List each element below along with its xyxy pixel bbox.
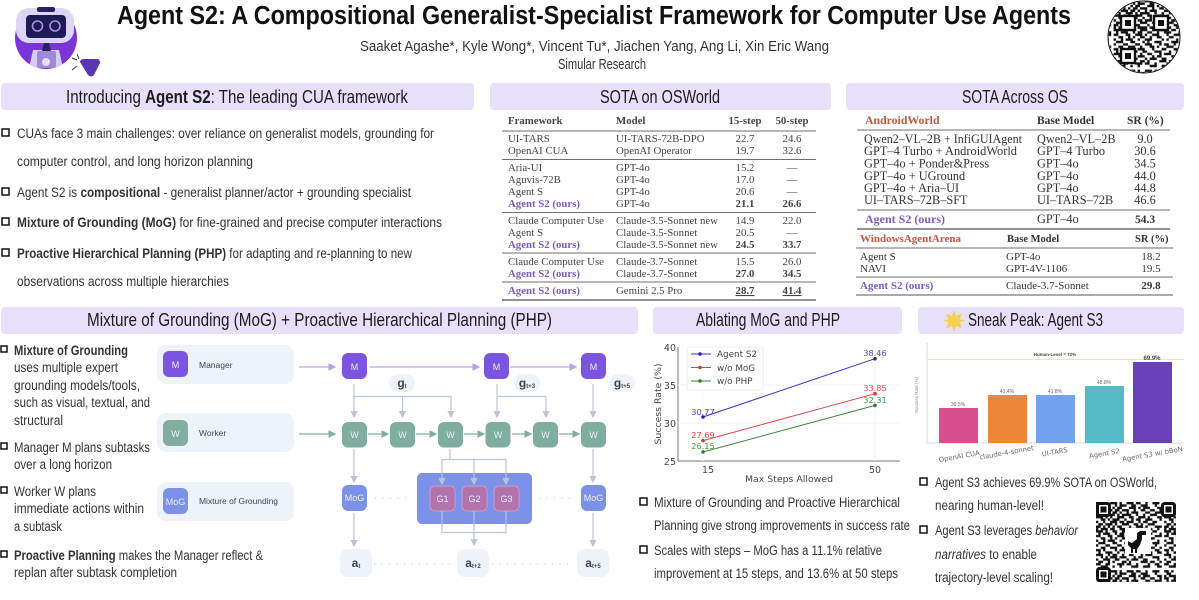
table: OSWorld results: Claude Computer Use xyxy=(508,256,604,268)
table: AndroidWorld: Qwen2–VL–2B xyxy=(1037,132,1116,146)
diagram: legend xyxy=(157,345,294,521)
table: OSWorld results: Framework xyxy=(508,115,563,127)
table: OSWorld results: Claude-3.7-Sonnet xyxy=(616,256,697,268)
diagram: worker nodes: W xyxy=(541,430,550,440)
line chart: success rate: Success Rate (%) xyxy=(654,363,664,445)
heading: SOTA on OSWorld xyxy=(490,83,831,110)
diagram: worker nodes xyxy=(342,422,606,448)
chart legend: w/o MoG xyxy=(717,364,755,374)
diagram: goal labels: g xyxy=(397,376,405,390)
table: AndroidWorld: GPT–4o xyxy=(1037,169,1079,183)
diagram: MoG nodes: MoG xyxy=(345,493,364,503)
bar chart: Agent S3 comparison: 30.5% xyxy=(951,402,966,408)
bar chart: Agent S3 comparison: Agent S3 w/ bBoN xyxy=(1122,445,1183,464)
table: WindowsAgentArena: 18.2 xyxy=(1141,251,1161,263)
diagram: worker nodes: W xyxy=(494,430,503,440)
line chart: success rate: 40 xyxy=(664,343,676,354)
table: AndroidWorld: 9.0 xyxy=(1137,132,1153,146)
bullet: strong improvements: Mixture of Grounding and Proactive Hierarchical xyxy=(654,495,900,511)
table: AndroidWorld: GPT–4o xyxy=(1037,156,1079,170)
table: OSWorld results: 20.5 xyxy=(736,227,754,239)
bullet: mixture of grounding details: grounding models/tools, xyxy=(14,378,140,394)
table: OSWorld results: 26.0 xyxy=(783,256,801,268)
bullet: proactive hierarchical planning: Proactive Hierarchical Planning (PHP) for adapting and re-planning to new xyxy=(17,246,413,262)
table: OSWorld results: 22.7 xyxy=(736,133,755,145)
table: AndroidWorld: GPT–4o + Aria–UI xyxy=(864,181,959,195)
line chart: success rate: 50 xyxy=(869,465,881,476)
diagram: goal labels: t+3 xyxy=(526,384,536,390)
table: AndroidWorld: GPT–4 Turbo xyxy=(1037,144,1105,158)
bar chart: Agent S3 comparison: 48.8% xyxy=(1097,380,1112,386)
diagram: manager nodes: M xyxy=(493,362,500,372)
table: OSWorld results: Aguvis-72B xyxy=(508,174,561,186)
diagram: MoG nodes: MoG xyxy=(584,493,603,503)
table: OSWorld results: Aria-UI xyxy=(508,162,543,174)
bullet: three challenges: computer control, and long horizon planning xyxy=(17,154,253,170)
line chart: success rate: 25 xyxy=(664,457,676,468)
table: AndroidWorld: 46.6 xyxy=(1134,193,1156,207)
bar chart: Agent S3 comparison: 41.4% xyxy=(1000,389,1015,395)
table: OSWorld results: — xyxy=(786,174,798,186)
table: AndroidWorld: UI–TARS–72B xyxy=(1037,193,1113,207)
heading: introducing: Introducing Agent S2: The leading CUA framework xyxy=(66,87,409,107)
table: AndroidWorld xyxy=(857,113,1170,229)
bullet: proactive planning xyxy=(1,548,263,581)
diagram: grounding box: G3 xyxy=(500,494,513,504)
bullet: mixture of grounding details: structural xyxy=(14,413,63,429)
bullet: worker xyxy=(1,484,144,535)
table: WindowsAgentArena: 29.8 xyxy=(1141,280,1161,292)
bullet: proactive planning: Proactive Planning makes the Manager reflect & xyxy=(14,548,263,564)
diagram: legend: Worker xyxy=(199,428,226,438)
bar chart: Agent S3 comparison: 41.8% xyxy=(1048,389,1063,395)
bullet: proactive hierarchical planning: observations across multiple hierarchies xyxy=(17,274,229,290)
bullet: worker: immediate actions within xyxy=(14,501,144,517)
table: OSWorld results: GPT-4o xyxy=(616,186,650,198)
table: OSWorld results: 34.5 xyxy=(783,268,801,280)
table: OSWorld results: 24.6 xyxy=(783,133,802,145)
table: OSWorld results: Claude-3.5-Sonnet new xyxy=(616,239,718,251)
panel: Sneak Peak Agent S3 xyxy=(914,307,1184,586)
table: OSWorld results: GPT-4o xyxy=(616,162,650,174)
heading: introducing xyxy=(1,83,474,110)
bullet: manager xyxy=(1,440,150,473)
table: AndroidWorld: 44.8 xyxy=(1134,181,1156,195)
table: WindowsAgentArena: Agent S2 (ours) xyxy=(860,280,934,292)
diagram: legend: Manager xyxy=(199,360,233,370)
table: OSWorld results: Claude-3.5-Sonnet new xyxy=(616,215,718,227)
diagram: worker nodes: W xyxy=(350,430,359,440)
bullet: three challenges xyxy=(2,126,434,170)
panel: Mixture of Grounding and Proactive Hierarchical Planning xyxy=(1,307,638,581)
table: WindowsAgentArena xyxy=(856,233,1173,295)
authors: Saaket Agashe*, Kyle Wong*, Vincent Tu*, Jiachen Yang, Ang Li, Xin Eric Wang xyxy=(360,38,829,55)
panel: SOTA Across OS xyxy=(846,83,1184,295)
heading: SOTA Across OS: SOTA Across OS xyxy=(962,87,1068,107)
heading: Sneak Peak xyxy=(918,307,1184,334)
diagram: arrows xyxy=(299,367,593,564)
heading: SOTA on OSWorld: SOTA on OSWorld xyxy=(600,87,720,107)
diagram: goal labels: g xyxy=(519,376,526,390)
table: AndroidWorld: GPT–4o + Ponder&Press xyxy=(864,156,989,170)
diagram: worker nodes: W xyxy=(398,430,407,440)
bullet: mixture of grounding details: uses multiple expert xyxy=(14,360,118,376)
table: AndroidWorld: 54.3 xyxy=(1135,214,1155,226)
table: OSWorld results: 14.9 xyxy=(736,215,754,227)
table: OSWorld results: 15.2 xyxy=(736,162,754,174)
table: AndroidWorld: Base Model xyxy=(1037,115,1094,127)
bullet: scales with steps: improvement at 15 steps, and 13.6% at 50 steps xyxy=(654,566,898,582)
table: OSWorld results: 21.1 xyxy=(736,198,754,210)
table: OSWorld results: Agent S2 (ours) xyxy=(508,239,580,251)
line chart: success rate: Max Steps Allowed xyxy=(745,475,833,485)
table: OSWorld results: UI-TARS xyxy=(508,133,550,145)
diagram: manager nodes: M xyxy=(590,362,597,372)
table: OSWorld results: 17.0 xyxy=(736,174,754,186)
heading: Ablating xyxy=(653,307,902,334)
table: OSWorld results: Agent S2 (ours) xyxy=(508,285,580,297)
bullet: mixture of grounding details: Mixture of Grounding xyxy=(14,343,128,359)
bar chart: Agent S3 comparison: OpenAI CUA xyxy=(938,449,981,464)
diagram: goal labels: g xyxy=(614,376,621,390)
table: OSWorld results xyxy=(502,115,816,300)
diagram: action nodes: t+5 xyxy=(592,564,601,570)
table: OSWorld results: — xyxy=(786,162,798,174)
bullet: compositional: Agent S2 is compositional - generalist planner/actor + grounding specialist xyxy=(17,185,411,201)
table: WindowsAgentArena: WindowsAgentArena xyxy=(860,233,962,245)
bar chart: Agent S3 comparison: Success Rate (%) xyxy=(914,376,919,413)
bullet: mixture of grounding: Mixture of Grounding (MoG) for fine-grained and precise computer interactions xyxy=(17,215,442,231)
diagram: worker nodes: W xyxy=(589,430,598,440)
table: OSWorld results: 20.6 xyxy=(736,186,755,198)
table: OSWorld results: Model xyxy=(616,115,645,127)
bullet: behavior narratives xyxy=(920,523,1079,586)
table: WindowsAgentArena: GPT-4o xyxy=(1006,251,1041,263)
diagram: legend: W xyxy=(171,429,180,439)
line chart: success rate: 30 xyxy=(664,419,676,430)
bullet: behavior narratives: trajectory-level scaling! xyxy=(935,570,1053,586)
bullet: 69.9% SOTA: nearing human-level! xyxy=(935,498,1044,514)
line chart: success rate xyxy=(654,343,900,485)
bar chart: Agent S3 comparison: 69.9% xyxy=(1143,356,1161,362)
bullet: strong improvements: Planning give strong improvements in success rate xyxy=(654,518,910,534)
table: OSWorld results: 50-step xyxy=(776,115,808,127)
table: OSWorld results: Agent S2 (ours) xyxy=(508,268,580,280)
table: OSWorld results: Claude-3.7-Sonnet xyxy=(616,268,697,280)
heading: SOTA Across OS xyxy=(846,83,1184,110)
line chart: success rate: 26.15 xyxy=(691,441,715,451)
table: AndroidWorld: AndroidWorld xyxy=(865,113,940,127)
bullet: scales with steps xyxy=(640,543,898,582)
bullet: mixture of grounding details xyxy=(1,343,150,429)
table: OSWorld results: Agent S xyxy=(508,227,543,239)
heading: MoG + PHP: Mixture of Grounding (MoG) + Proactive Hierarchical Planning (PHP) xyxy=(87,310,552,330)
line chart: success rate: 38.46 xyxy=(863,348,887,358)
table: AndroidWorld: 44.0 xyxy=(1134,169,1156,183)
diagram: goal labels xyxy=(389,374,635,392)
diagram: action nodes: a xyxy=(465,556,472,570)
diagram: action nodes: a xyxy=(585,556,592,570)
panel: Ablating MoG and PHP xyxy=(640,307,910,582)
diagram: MoG nodes xyxy=(342,485,606,511)
table: WindowsAgentArena: Agent S xyxy=(860,251,896,263)
diagram: grounding box xyxy=(417,449,532,545)
line chart: success rate: 15 xyxy=(702,465,714,476)
line chart: success rate: 33.85 xyxy=(863,383,887,393)
diagram: action nodes xyxy=(340,549,609,577)
bullet: scales with steps: Scales with steps – MoG has a 11.1% relative xyxy=(654,543,882,559)
chart legend xyxy=(687,347,763,390)
table: OSWorld results: OpenAI CUA xyxy=(508,145,568,157)
table: AndroidWorld: 34.5 xyxy=(1134,156,1156,170)
table: OSWorld results: GPT-4o xyxy=(616,198,650,210)
bullet: manager: Manager M plans subtasks xyxy=(14,440,150,456)
table: OSWorld results: Claude Computer Use xyxy=(508,215,604,227)
diagram: goal labels: t xyxy=(405,384,407,390)
bullet: manager: over a long horizon xyxy=(14,457,112,473)
title: Agent S2: A Compositional Generalist-Specialist Framework for Computer Use Agents xyxy=(117,2,1071,30)
icon: top QR code xyxy=(1108,1,1180,73)
panel: SOTA on OSWorld xyxy=(490,83,831,300)
table: OSWorld results: Claude-3.5-Sonnet xyxy=(616,227,697,239)
chart legend: Agent S2 xyxy=(717,350,757,360)
table: OSWorld results: 32.6 xyxy=(783,145,802,157)
bullet: behavior narratives: Agent S3 leverages behavior xyxy=(935,523,1079,539)
table: WindowsAgentArena: 19.5 xyxy=(1141,263,1161,275)
table: OSWorld results: 27.0 xyxy=(736,268,754,280)
table: AndroidWorld: 30.6 xyxy=(1134,144,1156,158)
bullet: worker: a subtask xyxy=(14,519,63,535)
table: OSWorld results: OpenAI Operator xyxy=(616,145,692,157)
table: AndroidWorld: Agent S2 (ours) xyxy=(865,212,945,226)
bar chart: Agent S3 comparison: Agent S2 xyxy=(1089,447,1120,460)
table: OSWorld results: 24.5 xyxy=(736,239,754,251)
bullet: proactive planning: replan after subtask completion xyxy=(14,565,177,581)
bullet: behavior narratives: narratives to enable xyxy=(935,547,1037,563)
bullet: mixture of grounding details: such as visual, textual, and xyxy=(14,395,150,411)
bar chart: Agent S3 comparison: claude-4-sonnet xyxy=(979,444,1035,462)
table: WindowsAgentArena: SR (%) xyxy=(1135,234,1169,245)
table: OSWorld results: — xyxy=(786,186,798,198)
panel: introducing Agent S2 xyxy=(1,83,474,290)
table: WindowsAgentArena: GPT-4V-1106 xyxy=(1006,263,1068,275)
line chart: success rate: 32.31 xyxy=(863,395,887,405)
heading: MoG + PHP xyxy=(1,307,638,334)
diagram: action nodes: a xyxy=(352,556,358,570)
heading: Ablating: Ablating MoG and PHP xyxy=(696,310,840,330)
diagram: action nodes: t xyxy=(358,564,360,570)
table: OSWorld results: UI-TARS-72B-DPO xyxy=(616,133,705,145)
table: WindowsAgentArena: Base Model xyxy=(1007,234,1059,245)
bullet: proactive hierarchical planning xyxy=(2,246,413,290)
table: OSWorld results: Gemini 2.5 Pro xyxy=(616,285,682,297)
table: OSWorld results: 41.4 xyxy=(783,285,802,297)
bullet: 69.9% SOTA xyxy=(920,475,1157,514)
heading: Sneak Peak: Sneak Peak: Agent S3 xyxy=(968,310,1103,330)
table: OSWorld results: 19.7 xyxy=(736,145,755,157)
diagram: legend: M xyxy=(172,360,179,370)
diagram: manager nodes xyxy=(342,353,606,379)
table: AndroidWorld: UI–TARS–72B–SFT xyxy=(864,193,968,207)
diagram: action nodes: t+2 xyxy=(472,564,481,570)
bar chart: Agent S3 comparison: UI-TARS xyxy=(1041,446,1068,459)
table: AndroidWorld: GPT–4 Turbo + AndroidWorld xyxy=(864,144,1017,158)
table: AndroidWorld: GPT–4o xyxy=(1037,212,1079,226)
table: OSWorld results: Agent S xyxy=(508,186,543,198)
table: OSWorld results: 22.0 xyxy=(783,215,801,227)
diagram: goal labels: t+5 xyxy=(621,384,631,390)
bar chart: Agent S3 comparison xyxy=(914,343,1184,464)
table: AndroidWorld: GPT–4o xyxy=(1037,181,1079,195)
table: OSWorld results: 28.7 xyxy=(736,285,755,297)
table: OSWorld results: 15.5 xyxy=(736,256,754,268)
diagram: legend: MoG xyxy=(166,497,185,507)
chart legend: w/o PHP xyxy=(717,377,753,387)
table: AndroidWorld: SR (%) xyxy=(1127,115,1164,127)
affiliation: Simular Research xyxy=(558,56,646,73)
bullet: worker: Worker W plans xyxy=(14,484,96,500)
line chart: success rate: 27.69 xyxy=(691,430,715,440)
bar chart: Agent S3 comparison: Human-Level = 72% xyxy=(1034,352,1076,357)
table: AndroidWorld: GPT–4o + UGround xyxy=(864,169,965,183)
diagram: worker nodes: W xyxy=(446,430,455,440)
bullet: three challenges: CUAs face 3 main challenges: over reliance on generalist models, grounding for xyxy=(17,126,434,142)
line chart: success rate: 30.77 xyxy=(691,407,715,417)
table: OSWorld results: 33.7 xyxy=(783,239,802,251)
diagram: legend: Mixture of Grounding xyxy=(199,496,278,506)
table: OSWorld results: GPT-4o xyxy=(616,174,650,186)
icon: S3 QR code with dinosaur xyxy=(1096,502,1176,582)
table: OSWorld results: — xyxy=(786,227,798,239)
diagram: manager nodes: M xyxy=(351,362,358,372)
icon: robot logo xyxy=(15,7,100,76)
diagram: grounding box: G2 xyxy=(468,494,481,504)
table: OSWorld results: 15-step xyxy=(728,115,762,127)
bullet: strong improvements xyxy=(640,495,910,534)
table: WindowsAgentArena: NAVI xyxy=(860,263,886,275)
line chart: success rate: 35 xyxy=(664,381,676,392)
table: WindowsAgentArena: Claude-3.7-Sonnet xyxy=(1006,280,1089,292)
table: OSWorld results: 26.6 xyxy=(783,198,802,210)
table: AndroidWorld: Qwen2–VL–2B + InfiGUIAgent xyxy=(864,132,1023,146)
diagram: grounding box: G1 xyxy=(436,494,449,504)
table: OSWorld results: Agent S2 (ours) xyxy=(508,198,580,210)
